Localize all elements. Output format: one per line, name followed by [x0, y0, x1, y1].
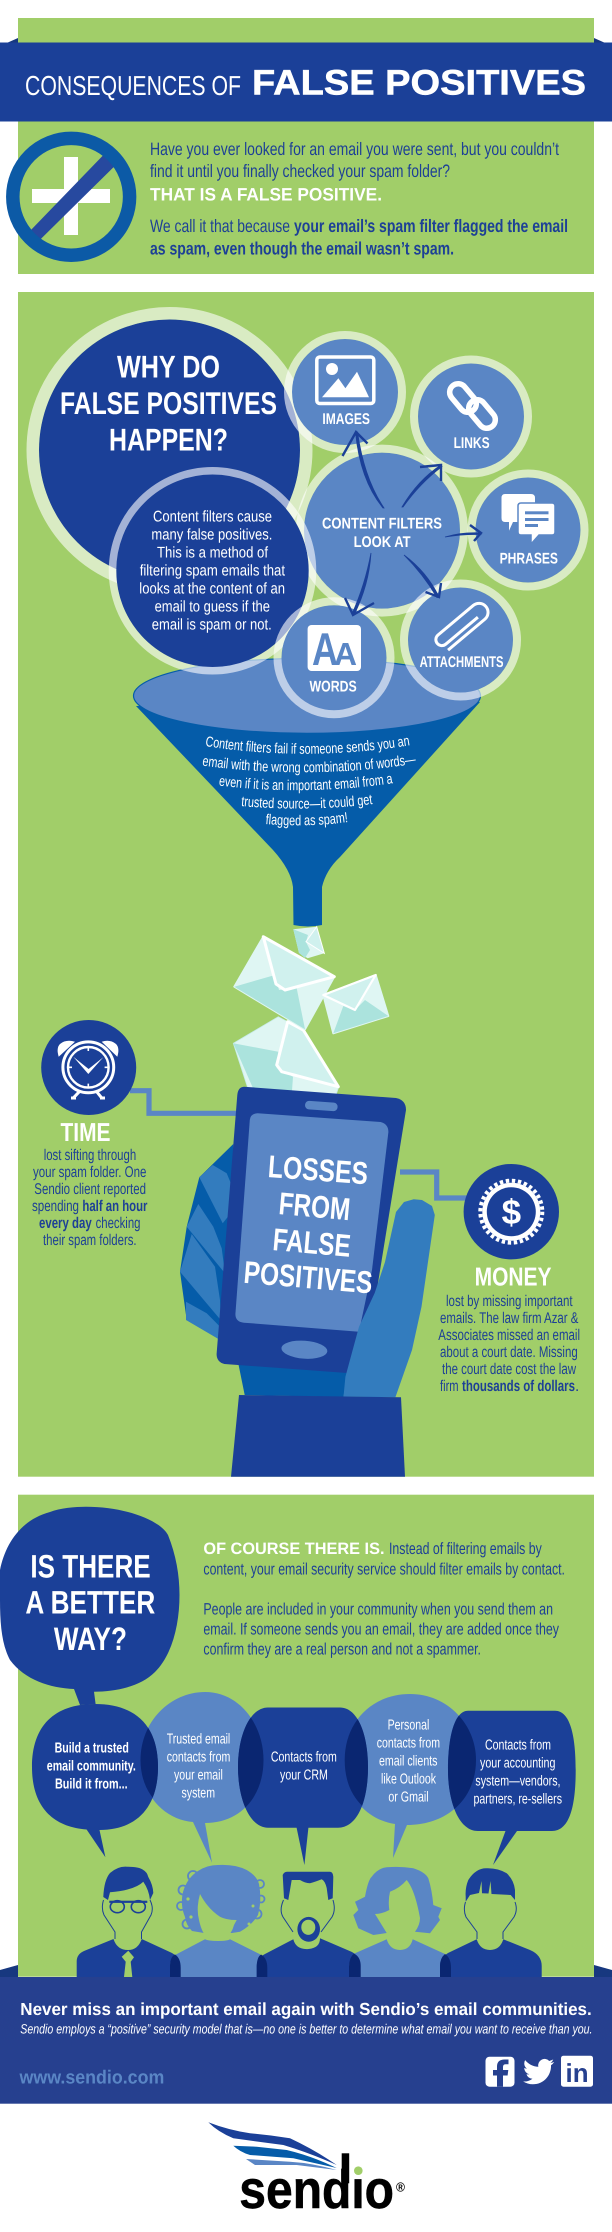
circle: links — [414, 360, 528, 474]
arrow to attachments — [404, 555, 441, 598]
logo: sendio: sendio — [239, 2160, 394, 2220]
logo d stem extension — [342, 2153, 349, 2183]
funnel text: email with the wrong combination of words— — [202, 756, 416, 776]
speech bubble: is there a better way: A BETTER — [25, 1584, 155, 1620]
person: woman with wavy hair — [349, 1867, 451, 1977]
funnel text: trusted source—it could get — [242, 794, 373, 809]
intro text — [150, 139, 568, 258]
footer banner — [0, 1965, 612, 2104]
icon: speech bubbles — [502, 494, 555, 544]
bubble: accounting contacts: partners, re-sellers — [474, 1792, 562, 1808]
time text: their spam folders. — [43, 1232, 137, 1249]
hair curls — [177, 1871, 264, 1928]
circle: content filter explanation — [112, 471, 312, 671]
circle: phrases: PHRASES — [500, 550, 558, 567]
intro text: find it until you finally checked your spam folder? — [150, 161, 450, 181]
bubble: personal contacts: email clients — [379, 1754, 438, 1770]
bubble: personal contacts — [345, 1694, 476, 1858]
time text — [32, 1117, 148, 1249]
connectors — [130, 1091, 468, 1198]
icon: crossed-out plus sign — [13, 138, 130, 255]
money text: lost by missing important — [446, 1293, 573, 1310]
bubble: personal contacts: Personal — [388, 1718, 429, 1734]
title banner: CONSEQUENCES OF — [25, 70, 241, 101]
icon: linkedin: in — [566, 2058, 588, 2088]
bubble: build a trusted community: Build a trusted — [55, 1741, 129, 1757]
arrows from content filters — [342, 432, 481, 615]
icon: money coin: $ — [502, 1193, 521, 1232]
circle: content filter explanation: filtering spam emails that — [140, 563, 286, 580]
better way text: confirm they are a real person and not a spammer. — [203, 1640, 481, 1658]
phone text — [242, 1148, 374, 1300]
woman face — [198, 1894, 237, 1940]
circle: images — [288, 335, 402, 449]
bubble: build a trusted community — [32, 1704, 158, 1857]
time text: TIME — [60, 1117, 110, 1147]
circle: attachments: ATTACHMENTS — [420, 654, 504, 671]
icon: letters Aa: A — [334, 636, 357, 672]
icon: palm — [238, 1362, 348, 1397]
circle: why do false positives happen: FALSE POSITIVES — [60, 385, 277, 421]
intro text: as spam, even though the email wasn’t spam. — [150, 238, 454, 258]
icon: linkedin — [561, 2056, 593, 2088]
icon: paperclip — [433, 600, 492, 653]
circle: content filter explanation: looks at the content of an — [139, 581, 285, 598]
bubble: build a trusted community: Build it from... — [55, 1777, 128, 1793]
time text: spending — [32, 1198, 79, 1215]
money text: MONEY — [475, 1261, 552, 1291]
speech bubbles: community sources — [32, 1692, 576, 1865]
money text: thousands of dollars — [462, 1378, 575, 1395]
icon: letters Aa — [308, 623, 361, 675]
circle: links: LINKS — [454, 435, 490, 452]
bubble: build a trusted community: email community. — [47, 1759, 136, 1775]
phone screen — [235, 1113, 388, 1332]
arrow to links — [402, 465, 442, 507]
time text: checking — [96, 1215, 140, 1232]
circle: words: WORDS — [310, 678, 357, 695]
funnel — [134, 658, 480, 926]
icon: money coin — [464, 1164, 559, 1259]
logo: sendio — [208, 2122, 405, 2220]
bubble: contacts from CRM — [238, 1708, 368, 1865]
logo wings — [208, 2122, 337, 2170]
circle: words — [278, 601, 390, 714]
hair highlights — [186, 1897, 254, 1926]
time text: Sendio client reported — [34, 1181, 146, 1198]
phone — [217, 1087, 406, 1373]
icon: hand fingers — [180, 1144, 235, 1347]
phone home button — [281, 1339, 328, 1360]
circle: content filter explanation: email is spam or not. — [152, 617, 272, 634]
time text: every day — [39, 1215, 92, 1232]
person: man with fringe — [440, 1868, 542, 1977]
time text: half an hour — [82, 1198, 148, 1215]
money text: firm — [440, 1378, 459, 1395]
speech bubble: is there a better way: IS THERE — [30, 1548, 151, 1584]
envelope: right — [323, 975, 388, 1033]
phone text: FALSE — [271, 1221, 352, 1264]
better way text: Instead of filtering emails by — [389, 1540, 542, 1558]
footer banner: Never miss an important email again with Sendio’s email communities. — [20, 1999, 592, 2019]
bubble: personal contacts: like Outlook — [381, 1772, 437, 1788]
footer banner: www.sendio.com — [19, 2067, 164, 2088]
circle: why do false positives happen — [33, 313, 306, 587]
icon: letters Aa: A — [312, 623, 338, 675]
bubble: trusted email contacts: your email — [174, 1768, 223, 1784]
person: bearded man — [257, 1872, 361, 1977]
bubble: accounting contacts: Contacts from — [485, 1738, 551, 1754]
panel: intro — [0, 18, 612, 274]
time text: your spam folder. One — [33, 1164, 146, 1181]
curly hair mass — [182, 1865, 260, 1933]
icon: twitter — [523, 2059, 554, 2084]
circle: phrases — [472, 474, 584, 586]
icon: alarm clock — [41, 1020, 136, 1115]
envelopes — [233, 927, 388, 1095]
circle: content filter explanation: email to guess if the — [155, 599, 270, 616]
money text — [438, 1261, 580, 1395]
circle: images: IMAGES — [322, 411, 370, 428]
icon: facebook — [486, 2057, 514, 2087]
circle: content filters look at: CONTENT FILTERS — [322, 516, 442, 533]
envelope: small — [293, 927, 324, 958]
arrow to images — [342, 432, 384, 508]
circle: content filter explanation: Content filters cause — [153, 509, 272, 526]
circle: why do false positives happen: HAPPEN? — [109, 422, 228, 458]
icon: thumb — [344, 1199, 435, 1397]
title banner: FALSE POSITIVES — [252, 62, 586, 102]
envelope: large — [234, 937, 334, 1029]
phone text: POSITIVES — [242, 1254, 374, 1300]
funnel text — [202, 736, 416, 828]
bubble: trusted email contacts: Trusted email — [167, 1732, 230, 1748]
money text: . — [575, 1378, 579, 1395]
bubble: accounting contacts: system—vendors, — [475, 1774, 560, 1790]
circle: why do false positives happen: WHY DO — [117, 349, 220, 385]
bubble: contacts from CRM: Contacts from — [271, 1750, 337, 1766]
funnel text: flagged as spam! — [266, 812, 348, 828]
phone speaker — [305, 1101, 338, 1111]
logo green dot — [352, 2162, 365, 2177]
bubble: accounting contacts: your accounting — [480, 1756, 555, 1772]
bubble: accounting contacts — [448, 1711, 576, 1865]
shoulder overlaps — [170, 1954, 451, 1977]
circle: content filters look at — [300, 449, 464, 613]
arrow to words — [345, 553, 374, 615]
arrow to phrases — [445, 525, 481, 541]
people — [77, 1865, 542, 1977]
icon: picture — [317, 357, 374, 404]
bubble: personal contacts: or Gmail — [388, 1790, 429, 1806]
bubble: trusted email contacts: contacts from — [167, 1750, 230, 1766]
better way text: OF COURSE THERE IS. — [203, 1540, 384, 1558]
bubble: contacts from CRM: your CRM — [280, 1768, 328, 1784]
intro text: THAT IS A FALSE POSITIVE. — [150, 185, 382, 205]
funnel text: even if it is an important email from a — [219, 776, 393, 794]
envelope: bottom — [233, 1017, 339, 1095]
phone text: FROM — [277, 1185, 352, 1227]
title banner — [0, 42, 612, 122]
person: man with glasses — [77, 1867, 181, 1977]
circle: content filters look at: LOOK AT — [354, 534, 411, 551]
icon: chain link — [446, 380, 499, 432]
person: woman with curly hair — [170, 1865, 267, 1977]
bubble: personal contacts: contacts from — [377, 1736, 440, 1752]
circle: content filter explanation: many false positives. — [151, 527, 272, 544]
phone text: LOSSES — [267, 1148, 369, 1191]
better way text — [203, 1540, 565, 1658]
intro text: We call it that because — [150, 216, 290, 236]
sleeve cuff — [231, 1395, 405, 1477]
funnel text: Content filters fail if someone sends you an — [206, 736, 410, 754]
circle: attachments — [404, 584, 517, 696]
bubble: trusted email contacts: system — [182, 1786, 215, 1802]
speech bubble: is there a better way: WAY? — [54, 1621, 127, 1657]
bubble: trusted email contacts — [140, 1692, 264, 1863]
logo: sendio: ® — [396, 2180, 405, 2194]
panel: why false positives happen — [18, 292, 594, 1477]
time text: lost sifting through — [44, 1147, 136, 1164]
panel: is there a better way — [0, 1495, 594, 1977]
circle: content filter explanation: This is a method of — [157, 545, 269, 562]
speech bubble: is there a better way — [0, 1507, 180, 1705]
